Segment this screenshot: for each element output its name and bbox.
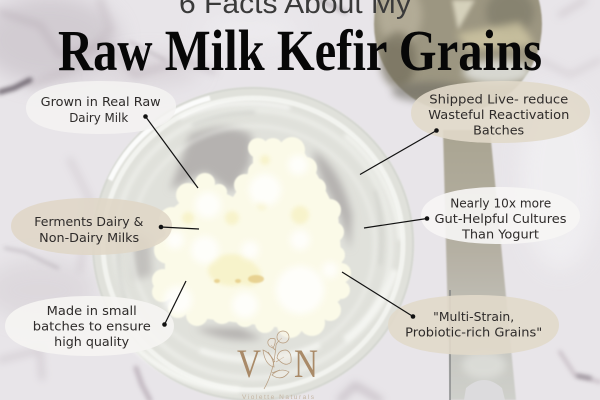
- pointer: shipped live: [360, 128, 439, 174]
- pointer: small batches: [162, 281, 186, 327]
- callout: shipped live: Batches: [473, 124, 524, 138]
- callout: gut-helpful cultures: Than Yogurt: [461, 228, 539, 242]
- callout: gut-helpful cultures: [421, 187, 580, 244]
- pointer: gut-helpful cultures: [364, 216, 429, 228]
- callout: ferments dairy: Ferments Dairy &: [34, 215, 144, 229]
- callout: multi-strain: "Multi-Strain,: [433, 310, 514, 324]
- callout: shipped live: [411, 81, 590, 143]
- callout: shipped live: Wasteful Reactivation: [428, 108, 569, 122]
- pointer: raw dairy milk: [143, 114, 198, 188]
- logo: [237, 331, 318, 400]
- spoon handle hole: [464, 380, 505, 400]
- logo: N: [294, 341, 318, 386]
- callout: small batches: high quality: [54, 335, 129, 349]
- glass bowl: [92, 87, 414, 400]
- callout: raw dairy milk: [26, 81, 176, 134]
- callout: raw dairy milk: Dairy Milk: [69, 111, 129, 125]
- callout: multi-strain: [388, 295, 559, 355]
- measuring spoon: [374, 0, 542, 400]
- callout: multi-strain: Probiotic-rich Grains": [405, 326, 542, 340]
- callout: ferments dairy: [11, 198, 172, 255]
- callout: ferments dairy: Non-Dairy Milks: [39, 231, 139, 245]
- callout: gut-helpful cultures: Gut-Helpful Cultures: [434, 212, 566, 226]
- callout: small batches: Made in small: [47, 304, 137, 318]
- callout: small batches: [5, 296, 174, 356]
- kefir grains: [152, 137, 351, 338]
- pointer: ferments dairy: [159, 225, 199, 229]
- callout: small batches: batches to ensure: [33, 320, 151, 334]
- logo: V: [237, 341, 261, 386]
- pointer: multi-strain: [342, 272, 415, 319]
- callout: gut-helpful cultures: Nearly 10x more: [450, 196, 551, 210]
- callout: raw dairy milk: Grown in Real Raw: [41, 95, 161, 109]
- callout: shipped live: Shipped Live- reduce: [429, 92, 568, 106]
